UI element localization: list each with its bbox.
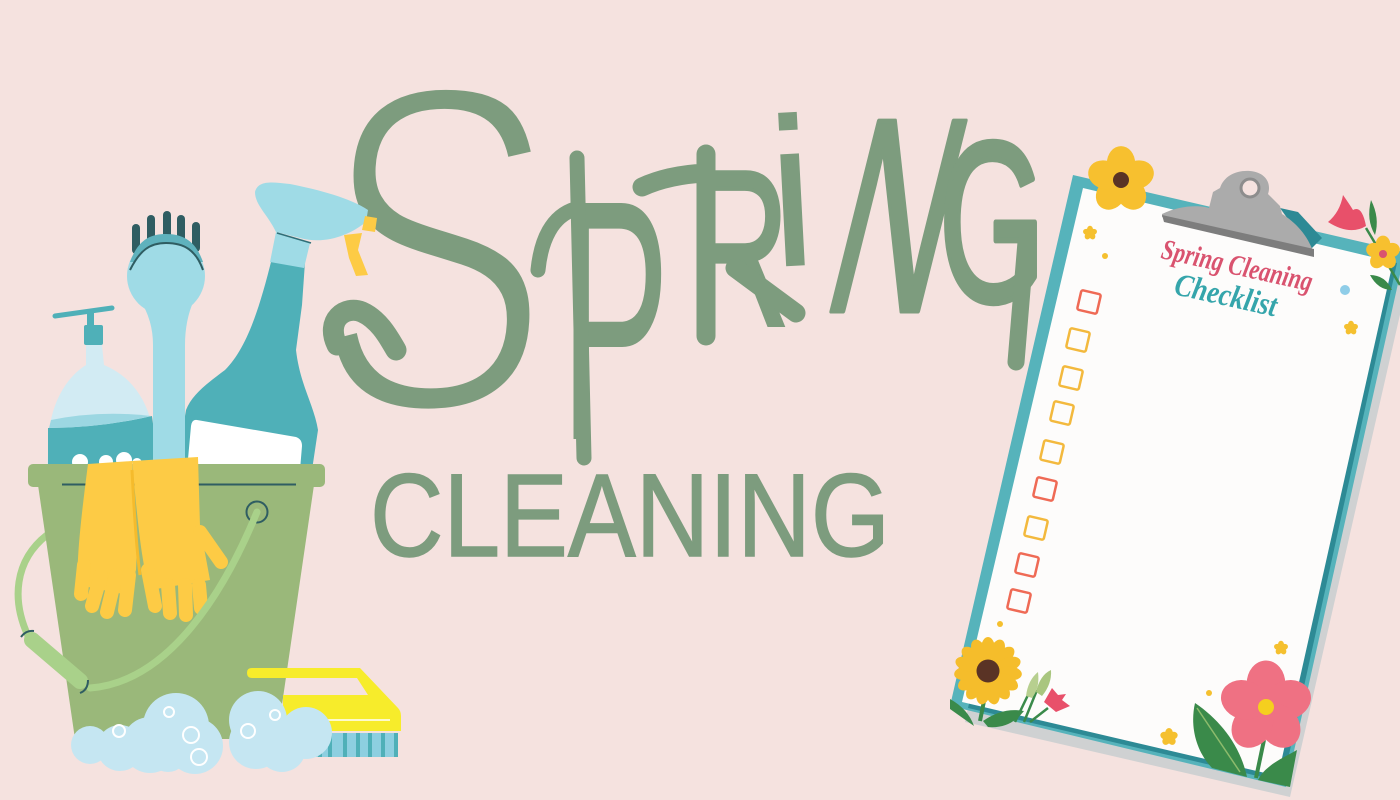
handle back loop (18, 535, 47, 640)
clipboard board (950, 175, 1400, 787)
letter G: G (939, 95, 1045, 350)
checkboxes (1007, 290, 1101, 613)
icon: blue dot (1340, 285, 1350, 295)
icon: scrubbing brush handle (127, 211, 205, 470)
title: Spring (303, 0, 1045, 513)
icon: small stars and dots (997, 226, 1359, 746)
icon: spray bottle (176, 182, 377, 470)
soap bubbles: left (71, 693, 223, 774)
letter S: S (303, 0, 569, 511)
bucket body (28, 464, 325, 739)
letter R (642, 125, 796, 373)
letter N: N (803, 61, 994, 370)
clipboard shadow (965, 182, 1400, 797)
checklist title: Checklist: Checklist (1171, 266, 1282, 324)
checklist title: Spring Cleaning: Spring Cleaning (1158, 234, 1316, 298)
soap bubbles: right (229, 691, 332, 772)
subtitle: CLEANING: CLEANING (370, 450, 890, 582)
letter R: R (690, 125, 789, 373)
icon: sunflower (950, 637, 1024, 727)
bucket handle (90, 512, 257, 688)
icon: pink flower (1216, 660, 1316, 756)
panel: clipboard checklist (950, 146, 1400, 797)
clip (1162, 171, 1322, 257)
letter P: P (560, 129, 670, 513)
handle grip (21, 631, 88, 693)
illustration: cleaning bucket (18, 182, 401, 774)
icon: yellow flower (1084, 146, 1158, 216)
rubber gloves (78, 457, 221, 615)
paper sheet (962, 188, 1393, 776)
scrub brush (247, 668, 401, 757)
icon: tulip sprig (1328, 195, 1400, 290)
board edge (968, 195, 1397, 782)
icon: large leaves (1193, 703, 1297, 787)
letter i: i (762, 73, 821, 312)
icon: buds and small tulip (1015, 670, 1070, 722)
icon: soap dispenser (47, 308, 159, 470)
